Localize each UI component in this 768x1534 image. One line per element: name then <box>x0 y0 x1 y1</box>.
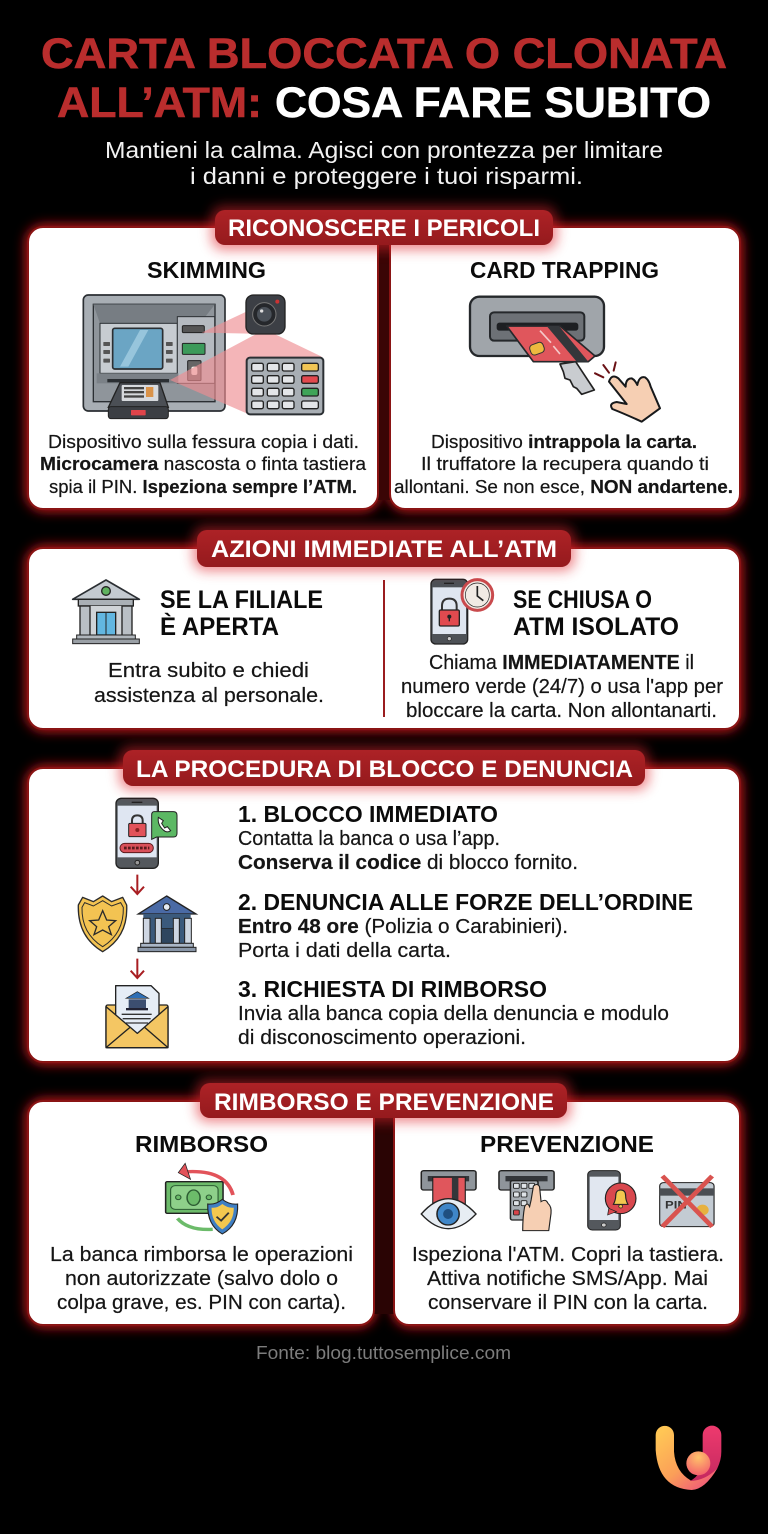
panel: prevenzione: PREVENZIONE <box>480 1131 654 1157</box>
step 2: Porta i dati della carta. <box>238 940 451 962</box>
panel: rimborso: RIMBORSO <box>135 1131 268 1157</box>
text: rimborso: colpa grave, es. PIN con carta). <box>57 1292 346 1314</box>
text: card trapping description <box>394 431 733 497</box>
text: filiale aperta: assistenza al personale. <box>94 685 324 707</box>
panel: card trapping <box>390 227 740 509</box>
step 2 <box>238 889 693 962</box>
icon: card stuck in slot with hand <box>470 297 660 422</box>
text: chiusa o isolato <box>401 652 723 722</box>
step 1: 1. BLOCCO IMMEDIATO <box>238 801 498 827</box>
panel: rimborso <box>28 1101 374 1325</box>
badge: la procedura: LA PROCEDURA DI BLOCCO E DENUNCIA <box>136 756 633 783</box>
subtitle: i danni e proteggere i tuoi risparmi. <box>190 163 583 189</box>
text: chiusa o isolato: numero verde (24/7) o usa l'app per <box>401 676 723 698</box>
text: skimming description: Dispositivo sulla fessura copia i dati. <box>48 431 359 452</box>
title: COSA FARE SUBITO <box>275 79 711 127</box>
step 1: Conserva il codice di blocco fornito. <box>238 852 578 874</box>
step 3: 3. RICHIESTA DI RIMBORSO <box>238 976 547 1002</box>
text: skimming description <box>40 431 367 497</box>
heading: se la filiale è aperta: SE LA FILIALE <box>160 586 323 614</box>
icon: bank branch <box>73 580 139 644</box>
text: prevenzione: Ispeziona l'ATM. Copri la tastiera. <box>412 1244 724 1266</box>
step 3: di disconoscimento operazioni. <box>238 1027 526 1049</box>
text: rimborso <box>50 1244 353 1314</box>
icon: phone with lock and clock <box>431 579 493 644</box>
text: prevenzione <box>412 1244 724 1314</box>
panel: azioni immediate all'ATM <box>28 548 740 729</box>
heading: se la filiale è aperta <box>160 586 323 641</box>
icon: ATM with skimmer, camera and fake keypad <box>83 295 323 419</box>
icon: inspect ATM slot <box>421 1171 476 1229</box>
text: prevenzione: Attiva notifiche SMS/App. Mai <box>427 1268 708 1290</box>
subtitle <box>105 137 663 189</box>
text: filiale aperta: Entra subito e chiedi <box>108 660 309 682</box>
arrow: step 1 to 2 <box>131 875 144 894</box>
step 1 <box>238 801 578 874</box>
title: ALL’ATM: <box>57 79 262 127</box>
text: chiusa o isolato: bloccare la carta. Non allontanarti. <box>406 700 717 722</box>
panel: card trapping: CARD TRAPPING <box>470 257 659 283</box>
text: prevenzione: conservare il PIN con la carta. <box>428 1292 708 1314</box>
text: skimming description: Microcamera nascosta o finta tastiera <box>40 453 367 474</box>
source line: Fonte: blog.tuttosemplice.com <box>256 1343 511 1363</box>
text: chiusa o isolato: Chiama IMMEDIATAMENTE il <box>429 652 694 674</box>
icon: crossed out PIN card: PIN <box>665 1198 687 1211</box>
panel: skimming: SKIMMING <box>147 257 266 283</box>
badge: rimborso e prevenzione: RIMBORSO E PREVENZIONE <box>214 1089 554 1116</box>
step 2: 2. DENUNCIA ALLE FORZE DELL’ORDINE <box>238 889 693 915</box>
panel: la procedura di blocco e denuncia <box>28 768 740 1062</box>
section: riconoscere i pericoli <box>26 206 742 511</box>
text: card trapping description: Il truffatore la recupera quando ti <box>421 453 709 474</box>
arrow: step 2 to 3 <box>131 959 144 978</box>
badge: riconoscere i pericoli: RICONOSCERE I PERICOLI <box>228 215 540 242</box>
text: card trapping description: Dispositivo intrappola la carta. <box>431 431 697 452</box>
badge: rimborso e prevenzione <box>196 1079 571 1122</box>
text: filiale aperta <box>94 660 324 707</box>
text: rimborso: non autorizzate (salvo dolo o <box>65 1268 338 1290</box>
section: azioni immediate <box>26 526 742 731</box>
icon: phone notification <box>588 1171 636 1230</box>
badge: azioni immediate <box>193 526 575 571</box>
heading: se chiusa o ATM isolato: ATM ISOLATO <box>513 613 679 641</box>
badge: la procedura <box>119 746 649 790</box>
flow icons: phone, police, bank, envelope <box>78 798 196 1048</box>
icon: money with shield <box>166 1163 238 1234</box>
step 2: Entro 48 ore (Polizia o Carabinieri). <box>238 916 568 938</box>
icon: cover keypad <box>499 1171 554 1231</box>
section: procedura <box>26 746 742 1064</box>
step 3 <box>238 976 669 1049</box>
text: rimborso: La banca rimborsa le operazioni <box>50 1244 353 1266</box>
title <box>41 30 727 127</box>
logo <box>656 1426 721 1490</box>
section: rimborso e prevenzione <box>26 1079 742 1327</box>
title: CARTA BLOCCATA O CLONATA <box>41 30 727 78</box>
subtitle: Mantieni la calma. Agisci con prontezza per limitare <box>105 137 663 163</box>
heading: se chiusa o ATM isolato <box>513 586 679 641</box>
text: card trapping description: allontani. Se non esce, NON andartene. <box>394 476 733 497</box>
panel: skimming <box>28 227 378 509</box>
badge: azioni immediate: AZIONI IMMEDIATE ALL’ATM <box>211 536 557 563</box>
panel: prevenzione <box>394 1101 740 1325</box>
heading: se la filiale è aperta: È APERTA <box>160 612 279 641</box>
step 1: Contatta la banca o usa l’app. <box>238 828 500 850</box>
icon: crossed out PIN card <box>660 1176 714 1227</box>
step 3: Invia alla banca copia della denuncia e modulo <box>238 1003 669 1025</box>
text: skimming description: spia il PIN. Ispeziona sempre l’ATM. <box>49 476 357 497</box>
badge: riconoscere i pericoli <box>211 206 557 250</box>
heading: se chiusa o ATM isolato: SE CHIUSA O <box>513 586 652 614</box>
